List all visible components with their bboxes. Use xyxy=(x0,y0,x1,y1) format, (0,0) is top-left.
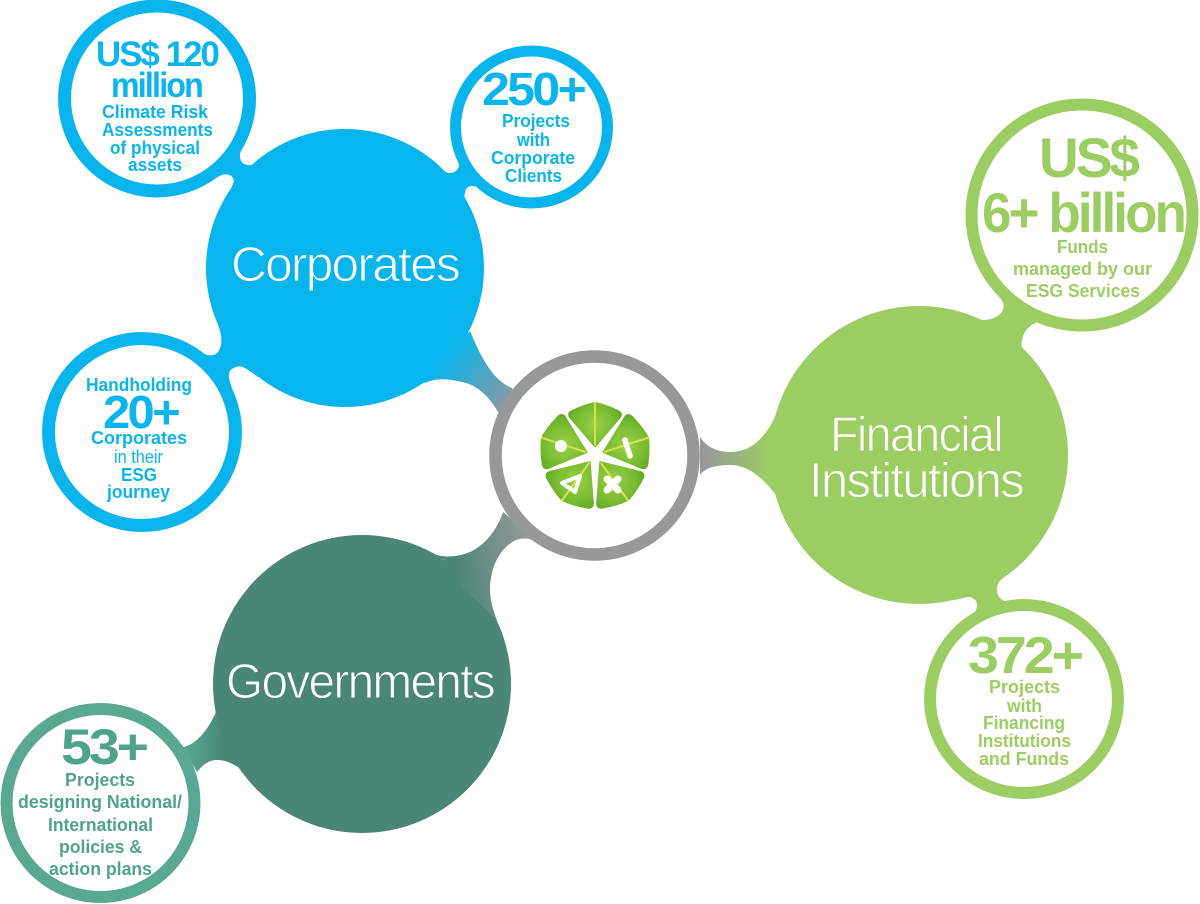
bubble: handholding 20+ corporates: journey xyxy=(106,482,170,502)
bubble: 372+ projects: Institutions xyxy=(978,731,1071,751)
bubble: handholding 20+ corporates: ESG xyxy=(121,465,157,485)
circle: corporates hub xyxy=(206,129,484,407)
bubble: US$ 120 million: assets xyxy=(128,155,182,175)
bubble: 372+ projects: Financing xyxy=(983,713,1065,733)
bubble: 372+ projects: Projects xyxy=(989,677,1060,697)
bubble: 53+ projects: designing National/ xyxy=(18,792,182,812)
bubble: 372+ projects: and Funds xyxy=(979,749,1069,769)
bubble: US$ 6+ billion xyxy=(972,104,1192,326)
label: Financial Institutions: Financial xyxy=(830,408,1002,462)
label: Governments: Governments xyxy=(226,655,494,709)
circle: governments hub xyxy=(213,535,511,833)
icon: white bar symbol xyxy=(625,440,630,456)
icon: white cross symbol xyxy=(607,479,618,490)
bubble: 53+ projects: policies & xyxy=(59,837,142,857)
bubble: US$ 6+ billion: Funds xyxy=(1057,237,1108,257)
panel: governments cluster xyxy=(6,512,540,897)
bubble: handholding 20+ corporates xyxy=(48,338,236,526)
bubble: handholding 20+ corporates: 20+ xyxy=(103,386,179,438)
bubble: 250+ projects: Projects xyxy=(502,111,570,131)
bubble: handholding 20+ corporates: in their xyxy=(114,447,163,467)
panel: corporates cluster xyxy=(48,6,608,526)
icon: white centre xyxy=(587,447,603,463)
connector: financial to projects bubble xyxy=(950,480,1025,622)
connector: financial to centre xyxy=(700,415,776,495)
bubble: 250+ projects: Clients xyxy=(505,166,562,186)
panel: centre logo ring xyxy=(496,356,694,554)
bubble: US$ 120 million: of physical xyxy=(110,138,200,158)
bubble: handholding 20+ corporates: Handholding xyxy=(86,375,192,395)
bubble: 372+ projects xyxy=(930,605,1118,793)
icon: white triangle symbol xyxy=(562,476,580,492)
circle: financial hub xyxy=(770,306,1068,604)
bubble: US$ 120 million: Assessments xyxy=(102,120,213,140)
bubble: 250+ projects: 250+ xyxy=(482,63,585,115)
bubble: 250+ projects: with xyxy=(516,130,550,150)
connector: corporates to handholding bubble xyxy=(195,300,300,388)
bubble: 53+ projects: International xyxy=(48,815,153,835)
label: Financial Institutions xyxy=(809,408,1023,508)
bubble: 53+ projects xyxy=(6,709,194,897)
connector: corporates to climate risk bubble xyxy=(203,130,290,230)
bubble: handholding 20+ corporates: Corporates xyxy=(91,428,187,448)
bubble: US$ 6+ billion: managed by our xyxy=(1013,259,1152,279)
icon: white circle symbol xyxy=(555,440,567,452)
label: Financial Institutions: Institutions xyxy=(809,454,1023,508)
bubble: US$ 6+ billion: ESG Services xyxy=(1026,281,1140,301)
bubble: 250+ projects xyxy=(456,51,608,203)
bubble: 372+ projects: with xyxy=(1006,696,1042,716)
connector: governments to centre xyxy=(430,512,540,620)
label: Corporates: Corporates xyxy=(231,238,459,292)
bubble: 53+ projects: Projects xyxy=(65,770,135,790)
connector: corporates to projects bubble xyxy=(420,155,484,220)
circle: grey ring xyxy=(496,356,694,554)
connector: governments to policy bubble xyxy=(183,712,300,772)
icon: five-petal leaf logo xyxy=(532,402,658,518)
bubble: US$ 120 million xyxy=(64,6,250,191)
bubble: 53+ projects: action plans xyxy=(49,859,152,879)
bubble: US$ 6+ billion: 6+ billion xyxy=(982,181,1184,244)
connector: corporates to centre xyxy=(421,331,530,420)
bubble: 250+ projects: Corporate xyxy=(491,148,575,168)
panel: financial institutions cluster xyxy=(700,104,1192,793)
bubble: US$ 120 million: Climate Risk xyxy=(102,102,209,122)
bubble: 372+ projects: 372+ xyxy=(968,627,1083,685)
bubble: US$ 120 million: US$ 120 xyxy=(96,35,219,74)
bubble: US$ 120 million: million xyxy=(111,66,202,105)
bubble: 53+ projects: 53+ xyxy=(61,719,148,775)
bubble: US$ 6+ billion: US$ xyxy=(1039,126,1140,189)
connector: financial to funds bubble xyxy=(950,297,1038,400)
